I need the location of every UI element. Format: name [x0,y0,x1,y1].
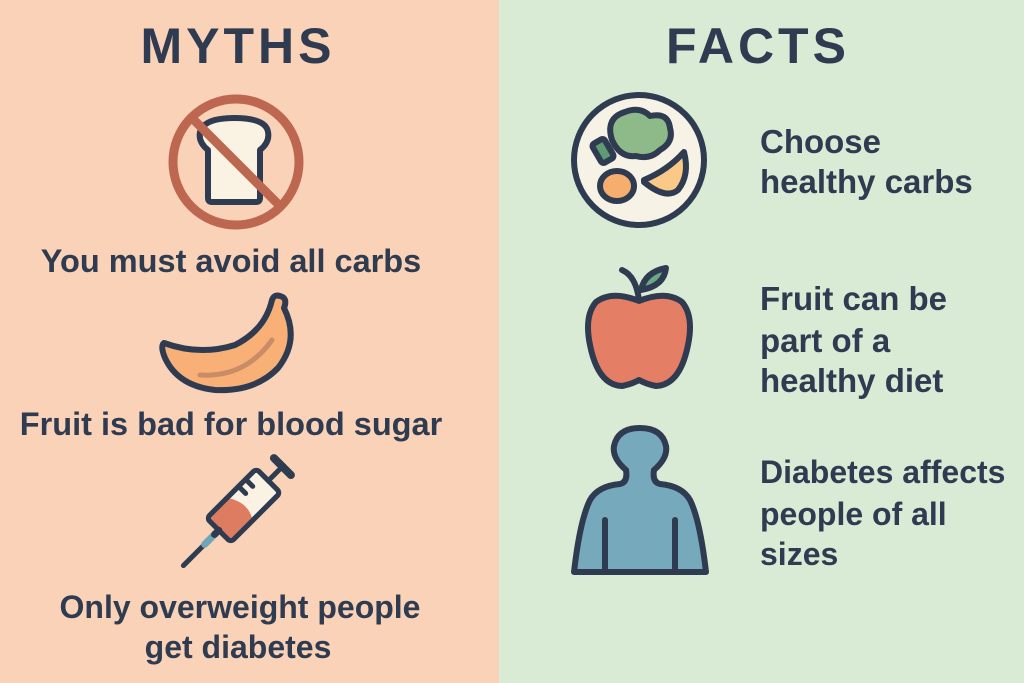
panel: myths background [0,0,499,683]
text: myth 3 [60,589,420,665]
text: myth 3: Only overweight people [60,589,420,625]
text: fact 2 [760,280,947,399]
text: fact 2: healthy diet [760,362,943,399]
icon: apple [588,268,690,386]
text: fact 3 [760,454,1005,572]
title: myths: MYTHS [140,18,336,74]
text: fact 3: Diabetes affects [760,454,1005,490]
panel: facts background [499,0,1024,683]
icon: person [574,428,706,572]
text: fact 1: healthy carbs [760,163,973,200]
text: myth 2: Fruit is bad for blood sugar [20,406,443,442]
text: fact 2: Fruit can be [760,280,947,317]
icon: plate [574,95,704,225]
text: fact 3: people of all [760,496,947,532]
text: fact 1 [760,123,973,200]
icon: banana [162,296,291,390]
text: fact 3: sizes [760,536,838,572]
text: fact 1: Choose [760,123,881,160]
text: myth 3: get diabetes [145,629,331,665]
text: myth 1: You must avoid all carbs [41,243,421,279]
icon: no bread [173,99,299,225]
icon: syringe [171,455,294,578]
title: facts: FACTS [666,18,850,74]
text: fact 2: part of a [760,322,891,359]
